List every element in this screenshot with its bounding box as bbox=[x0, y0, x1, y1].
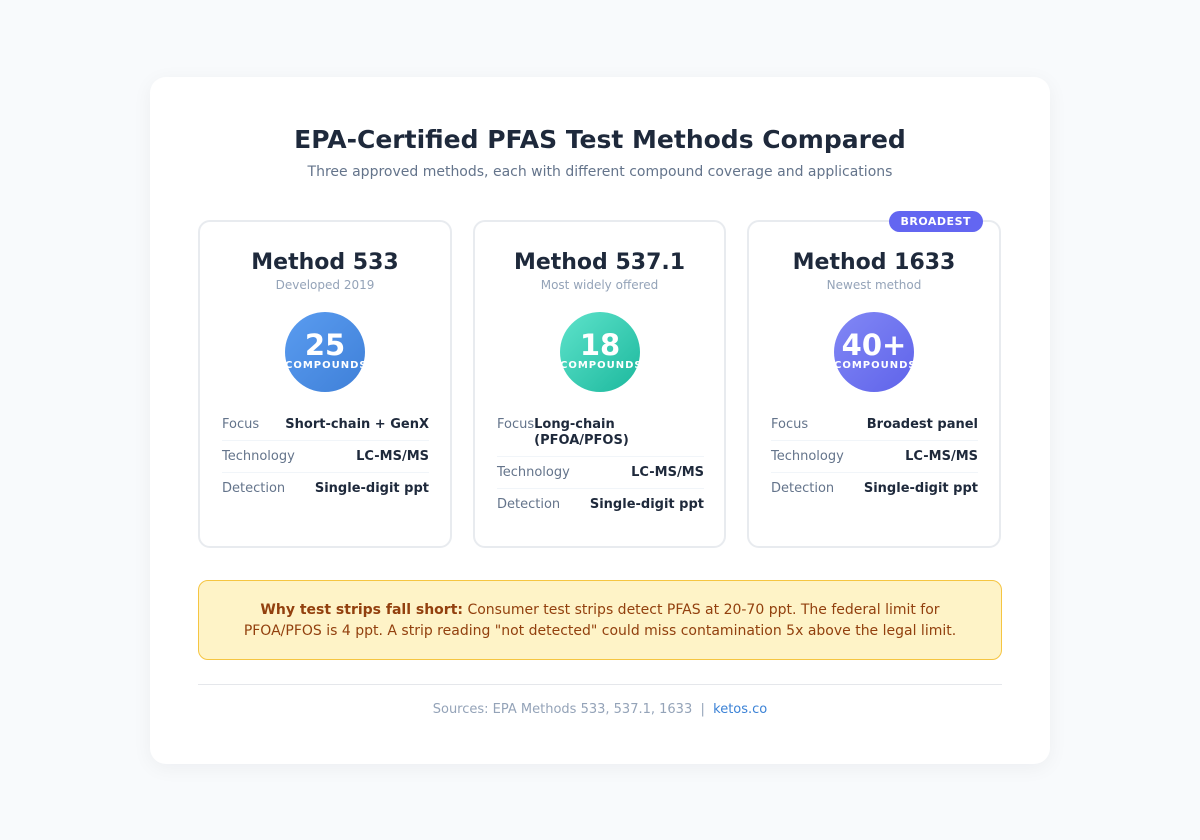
detail rows: Detection bbox=[497, 497, 560, 512]
detail rows bbox=[770, 417, 978, 496]
main panel bbox=[150, 77, 1050, 764]
card: method 537.1 bbox=[473, 220, 726, 548]
card subtitle: Most widely offered bbox=[541, 278, 658, 292]
detail rows: Short-chain + GenX bbox=[285, 417, 429, 432]
card title: Method 533 bbox=[251, 250, 399, 275]
badge bbox=[888, 211, 983, 232]
detail rows: Single-digit ppt bbox=[864, 481, 978, 496]
icon: compound circle 40+ bbox=[834, 312, 914, 392]
detail rows: Single-digit ppt bbox=[315, 481, 429, 496]
icon: compound circle 18: 18 bbox=[580, 328, 620, 362]
icon: compound circle 18: COMPOUNDS bbox=[560, 360, 643, 371]
detail rows bbox=[222, 417, 429, 496]
detail rows: Broadest panel bbox=[867, 417, 978, 432]
icon: compound circle 25 bbox=[285, 312, 365, 392]
detail rows: Single-digit ppt bbox=[590, 497, 704, 512]
title: EPA-Certified PFAS Test Methods Compared bbox=[294, 125, 906, 154]
icon: compound circle 18 bbox=[560, 312, 640, 392]
card title: Method 1633 bbox=[793, 250, 955, 275]
icon: compound circle 25: 25 bbox=[305, 328, 345, 362]
callout: Why test strips fall short: Consumer test strips detect PFAS at 20-70 ppt. The federal limit for PFOA/PFOS is 4 ppt. A strip reading "not detected" could miss contamination 5x above the legal limit. bbox=[244, 602, 956, 639]
card: method 1633 bbox=[747, 220, 1001, 548]
detail rows: Technology bbox=[497, 465, 570, 480]
icon: compound circle 40+: 40+ bbox=[842, 328, 906, 362]
badge: BROADEST bbox=[900, 215, 971, 228]
detail rows bbox=[496, 417, 704, 512]
card subtitle: Newest method bbox=[827, 278, 921, 292]
detail rows: LC-MS/MS bbox=[905, 449, 978, 464]
detail rows: Long-chain bbox=[534, 417, 615, 432]
detail rows: Detection bbox=[222, 481, 285, 496]
callout bbox=[198, 580, 1002, 660]
card: method 533 bbox=[198, 220, 452, 548]
icon: compound circle 40+: COMPOUNDS bbox=[834, 360, 917, 371]
detail rows: Technology bbox=[222, 449, 295, 464]
detail rows: LC-MS/MS bbox=[631, 465, 704, 480]
detail rows: (PFOA/PFOS) bbox=[534, 433, 629, 448]
icon: compound circle 25: COMPOUNDS bbox=[285, 360, 368, 371]
footer sources: Sources: EPA Methods 533, 537.1, 1633 | ketos.co bbox=[433, 702, 767, 717]
detail rows: Technology bbox=[771, 449, 844, 464]
card title: Method 537.1 bbox=[514, 250, 685, 275]
subtitle: Three approved methods, each with different compound coverage and applications bbox=[308, 164, 892, 180]
detail rows: Detection bbox=[771, 481, 834, 496]
detail rows: Focus bbox=[771, 417, 808, 432]
detail rows: Focus bbox=[222, 417, 259, 432]
card subtitle: Developed 2019 bbox=[276, 278, 374, 292]
detail rows: Focus bbox=[497, 417, 534, 432]
detail rows: LC-MS/MS bbox=[356, 449, 429, 464]
